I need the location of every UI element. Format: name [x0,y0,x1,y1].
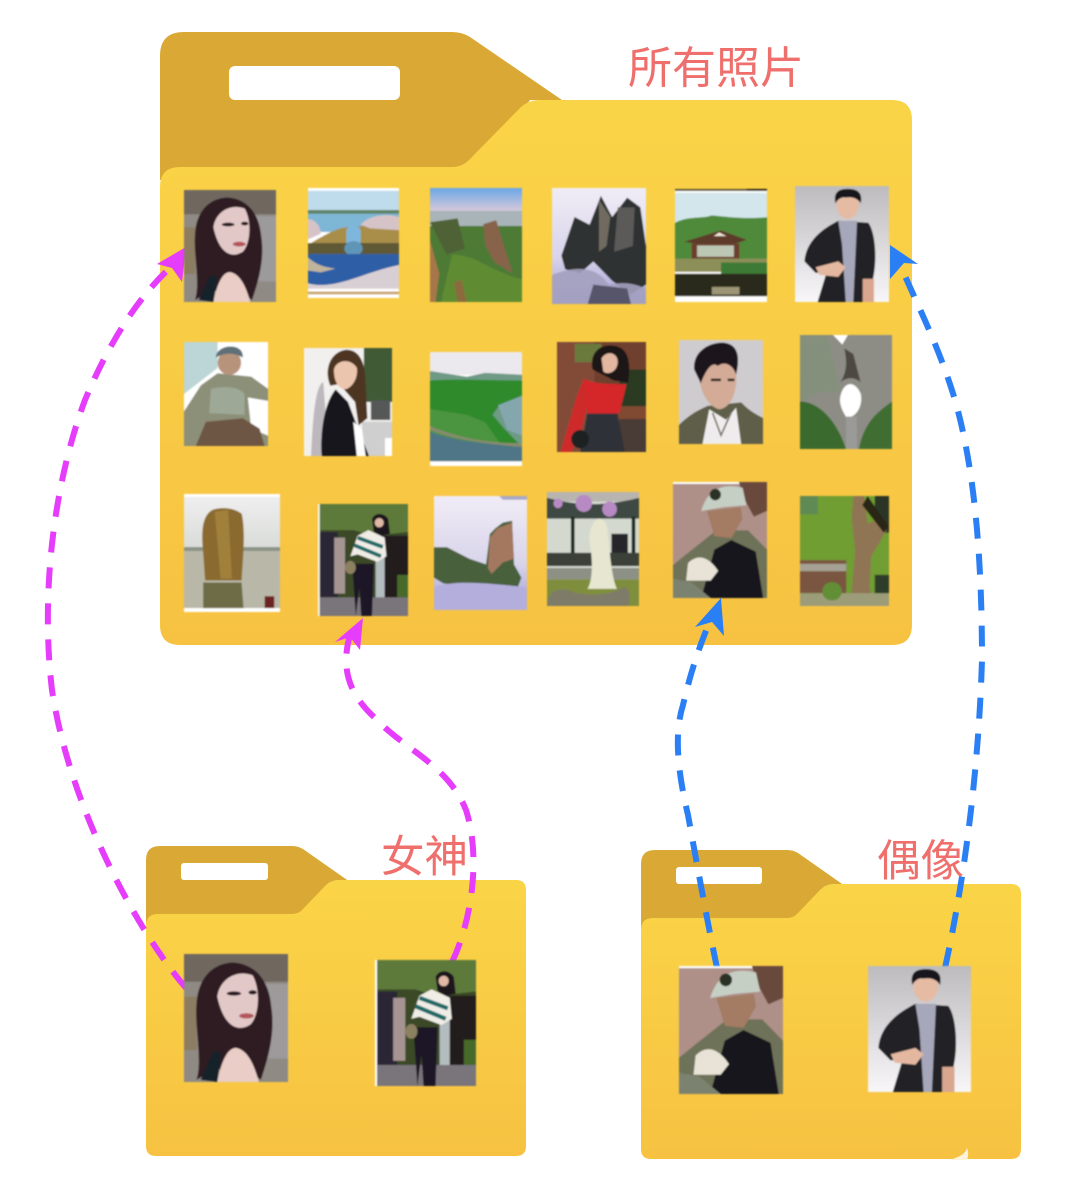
folder: all photos [160,32,912,645]
photo: woman in black jacket [304,348,392,456]
photos: goddess folder [184,954,478,1086]
photo: green mountains [430,188,522,302]
photo: man in suit [868,966,971,1092]
folder tab label [676,867,762,884]
photo: misty peaks [552,188,646,304]
arrow: idol photo 2 to all photos [890,245,982,968]
photo: peak in mist [434,496,527,610]
folder: goddess [146,846,526,1156]
photo: woman in striped top [318,504,410,616]
photo: pavilion [675,189,767,302]
photo: woman portrait [184,954,288,1082]
photo: soldier with cap [679,966,783,1094]
arrow: goddess photo 2 to all photos [335,618,473,962]
photos: idols folder [679,966,971,1094]
photo: green island [430,352,522,466]
photo: rock in lake [184,494,280,612]
photo: man portrait [679,340,763,444]
photo: soldier action [184,342,268,446]
folder: idols [641,850,1021,1160]
folder tab label [181,863,268,880]
photo: woman in red [557,342,646,452]
title: idols: 偶像 [877,838,964,886]
photo: soldier with cap [673,482,767,598]
photo: big tree [800,496,889,606]
title: goddess: 女神 [381,834,468,882]
photo: woman in striped top [375,960,478,1086]
photo: cliff arch [800,335,892,449]
photo: statue garden [547,492,639,606]
photo: stone bridge [308,188,399,298]
arrow: goddess photo 1 to all photos [48,247,186,988]
title: all photos: 所有照片 [628,44,804,93]
folder tab label [229,66,400,100]
arrow: idol photo 1 to all photos [678,598,724,968]
photo: woman portrait [184,190,276,302]
photo: man in suit [795,186,889,302]
photo grid: all photos [184,186,892,616]
